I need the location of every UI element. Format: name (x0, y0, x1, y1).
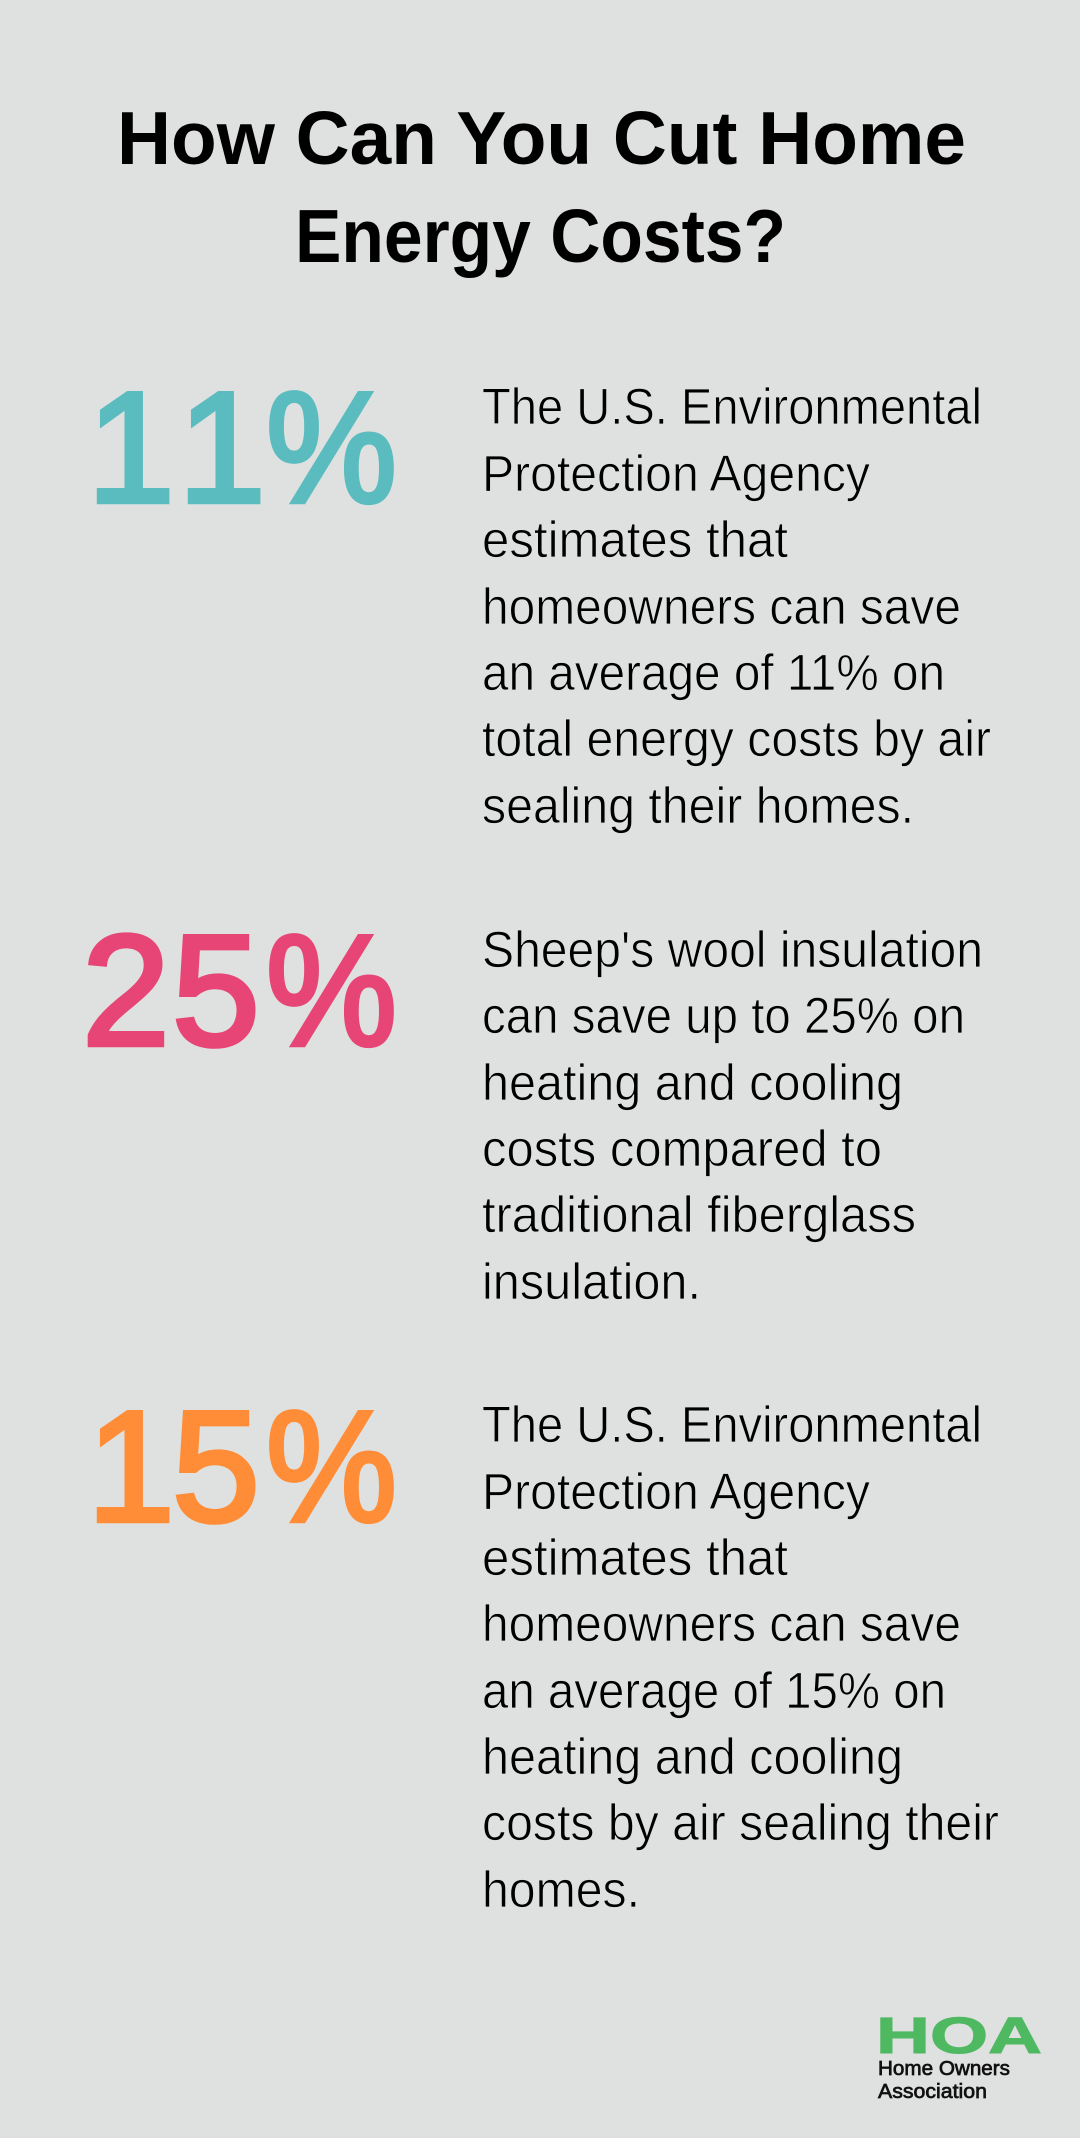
logo: Home Owners Association: Home Owners (878, 2058, 1010, 2080)
text block: 15% description: costs by air sealing their (482, 1794, 999, 1851)
stat: 11%: 1 (87, 360, 175, 536)
text block: 11% description: estimates that (482, 511, 788, 568)
text block: 25% description: insulation. (482, 1253, 701, 1310)
text block: 11% description: total energy costs by air (482, 710, 991, 767)
text block: 15% description (482, 1396, 999, 1918)
stat: 15%: 1 (87, 1379, 175, 1555)
stat: 15%: % (266, 1379, 397, 1555)
title: How Can You Cut Home (117, 96, 966, 180)
panel: 25% sheep's wool insulation (82, 903, 983, 1310)
text block: 11% description (482, 378, 991, 834)
text block: 25% description: Sheep's wool insulation (482, 921, 983, 978)
text block: 11% description: homeowners can save (482, 578, 961, 635)
stat: 25%: 2 (82, 903, 170, 1079)
text block: 15% description: heating and cooling (482, 1728, 903, 1785)
text block: 15% description: homeowners can save (482, 1595, 961, 1652)
text block: 15% description: an average of 15% on (482, 1662, 946, 1719)
text block: 11% description: Protection Agency (482, 445, 870, 502)
text block: 15% description: The U.S. Environmental (482, 1396, 982, 1453)
text block: 15% description: Protection Agency (482, 1463, 870, 1520)
logo: Home Owners Association: Association (878, 2081, 987, 2103)
text block: 25% description: can save up to 25% on (482, 987, 965, 1044)
text block: 15% description: homes. (482, 1861, 640, 1918)
text block: 25% description (482, 921, 983, 1310)
stat: 15%: 5 (172, 1379, 260, 1555)
logo: Home Owners Association: HOA (876, 2007, 1042, 2064)
text block: 25% description: costs compared to (482, 1120, 882, 1177)
text block: 11% description: The U.S. Environmental (482, 378, 982, 435)
stat: 11%: % (266, 360, 397, 536)
stat: 25%: 5 (172, 903, 260, 1079)
stat: 11%: 1 (178, 360, 266, 536)
panel: 11% air sealing total energy (87, 360, 991, 834)
text block: 11% description: sealing their homes. (482, 777, 914, 834)
panel: 15% heating and cooling (87, 1379, 999, 1918)
title (117, 96, 966, 278)
title: Energy Costs? (295, 194, 786, 278)
logo: Home Owners Association (876, 2007, 1042, 2103)
stat: 25%: % (266, 903, 397, 1079)
text block: 25% description: traditional fiberglass (482, 1186, 916, 1243)
text block: 11% description: an average of 11% on (482, 644, 945, 701)
text block: 15% description: estimates that (482, 1529, 788, 1586)
text block: 25% description: heating and cooling (482, 1054, 903, 1111)
